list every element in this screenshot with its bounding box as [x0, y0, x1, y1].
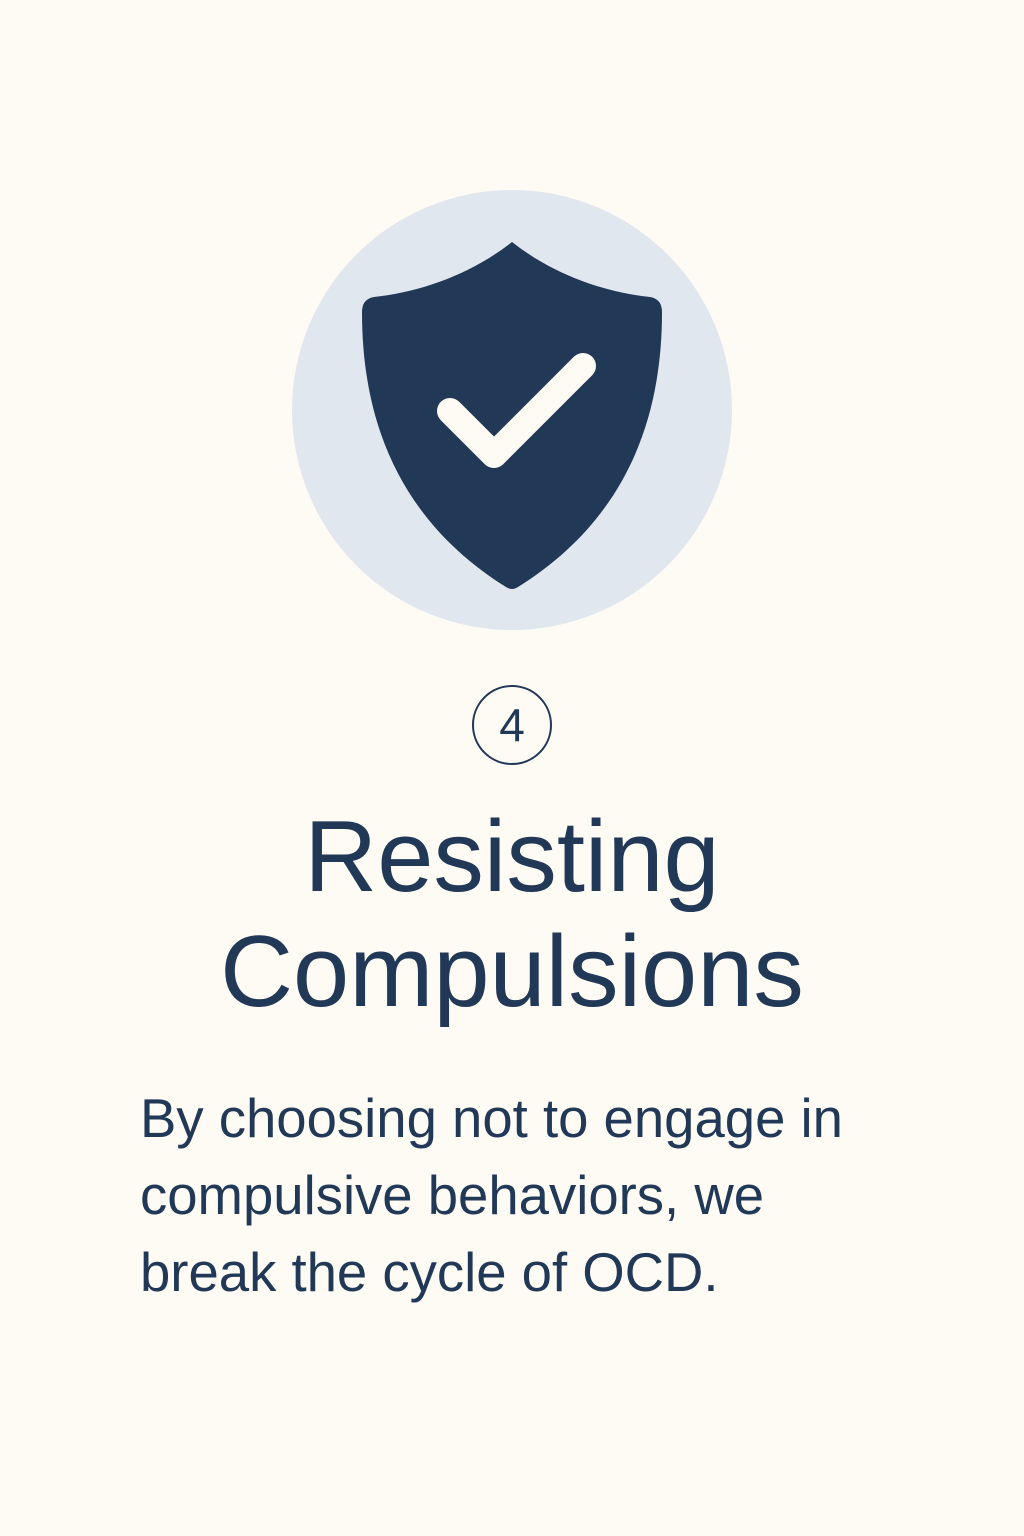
title: Resisting — [304, 801, 720, 913]
icon: shield with checkmark in circle — [292, 190, 732, 630]
body text: compulsive behaviors, we — [140, 1165, 764, 1226]
checkmark — [450, 366, 583, 455]
body text: By choosing not to engage in — [140, 1088, 843, 1149]
title — [220, 801, 804, 1028]
title: Compulsions — [220, 916, 804, 1028]
body text: break the cycle of OCD. — [140, 1242, 719, 1303]
shield — [362, 242, 662, 589]
step number badge: 4 — [499, 699, 525, 751]
body text — [140, 1088, 843, 1303]
icon background circle — [292, 190, 732, 630]
step number badge — [472, 685, 552, 765]
